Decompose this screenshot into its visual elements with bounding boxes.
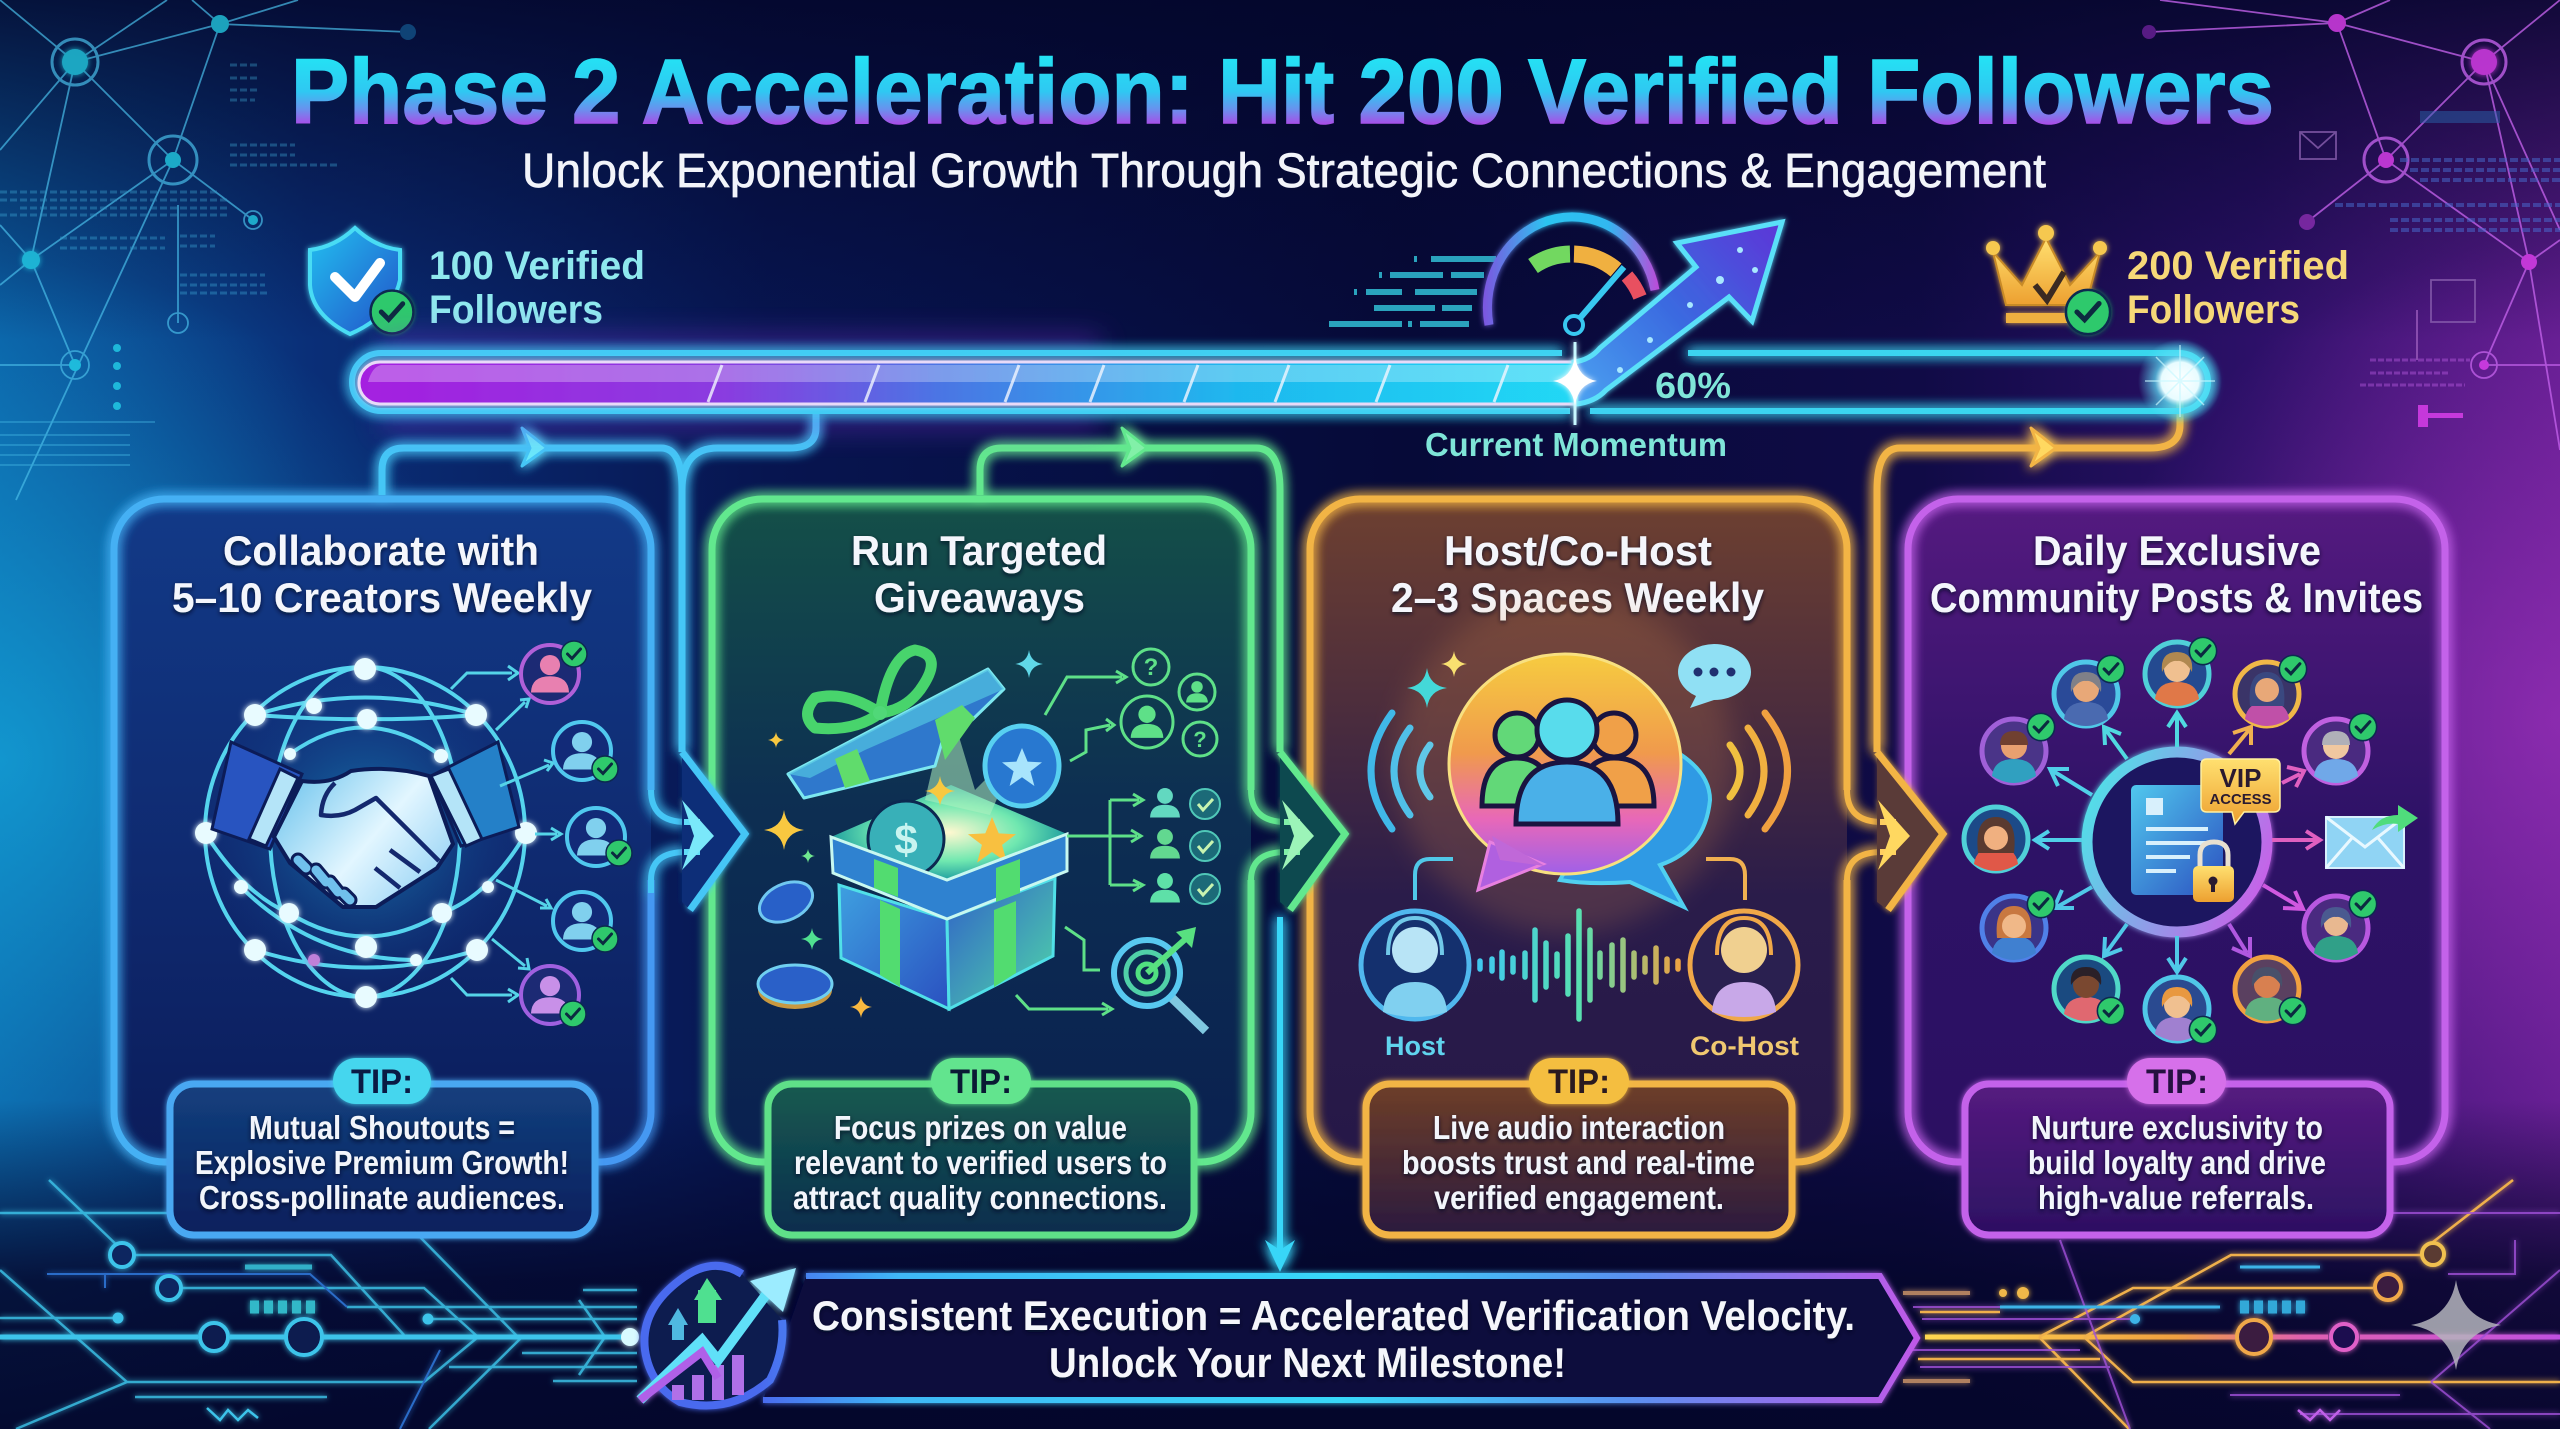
tip text: build loyalty and drive bbox=[2028, 1144, 2326, 1181]
panel 2 content: giveaways: ? bbox=[1144, 654, 1158, 681]
circuit decoration: bottom right bbox=[1900, 1180, 2560, 1429]
icon: chat bubbles with group bbox=[1395, 594, 1751, 934]
tip pill bbox=[1529, 1058, 1629, 1104]
end milestone: 200 verified followers bbox=[1986, 225, 2349, 334]
VIP access tag bbox=[2201, 759, 2280, 824]
end node glow bbox=[2138, 339, 2222, 423]
community avatars bbox=[1964, 637, 2377, 1044]
panel 4 background bbox=[1908, 499, 2445, 1162]
tip pill: TIP: bbox=[1548, 1063, 1610, 1101]
subtitle: Unlock Exponential Growth Through Strategic Connections & Engagement bbox=[522, 145, 2046, 198]
panel 4 outline bbox=[1908, 499, 2445, 1162]
circuit decoration: bottom left bbox=[0, 1180, 639, 1429]
start label bbox=[429, 244, 645, 332]
tip box 2 bbox=[768, 1058, 1194, 1235]
tip text bbox=[793, 1109, 1167, 1216]
icon: globe network with handshake bbox=[195, 641, 632, 1027]
icon: decorative sparkle bottom right bbox=[2411, 1280, 2501, 1370]
tip text: verified engagement. bbox=[1434, 1179, 1724, 1216]
panel 2 heading: Run Targeted bbox=[851, 527, 1107, 574]
progress bar fill bbox=[359, 362, 1576, 404]
arrow chevron: panel 2 to 3 bbox=[1280, 752, 1345, 910]
label: co-host: Co-Host bbox=[1690, 1031, 1799, 1061]
tip text: Live audio interaction bbox=[1433, 1109, 1725, 1146]
icon: hub ring with document, lock and VIP tag bbox=[2087, 752, 2280, 932]
panel 2 heading: Giveaways bbox=[874, 574, 1085, 621]
banner text bbox=[812, 1292, 1855, 1386]
tip text: Explosive Premium Growth! bbox=[195, 1144, 569, 1181]
arrow chevron: panel 3 to 4 bbox=[1877, 752, 1943, 910]
connector and panel outline: orange bbox=[1310, 400, 2180, 1162]
targeted connectors and users bbox=[1016, 649, 1217, 1015]
tip text bbox=[2028, 1109, 2326, 1216]
tip box 3 bbox=[1366, 1058, 1792, 1235]
network decoration: top left bbox=[0, 0, 416, 500]
tip text: attract quality connections. bbox=[793, 1179, 1167, 1216]
tip text: Focus prizes on value bbox=[834, 1109, 1127, 1146]
tip text: Mutual Shoutouts = bbox=[249, 1109, 515, 1146]
start milestone: 100 verified followers bbox=[310, 228, 645, 334]
panel 1 content: collaborate bbox=[170, 527, 632, 1235]
icon: crown with check bbox=[1986, 225, 2110, 334]
tip text: high-value referrals. bbox=[2038, 1179, 2314, 1216]
banner text: Consistent Execution = Accelerated Verification Velocity. bbox=[812, 1292, 1855, 1339]
panel 3 heading: 2–3 Spaces Weekly bbox=[1391, 574, 1765, 621]
current position marker bbox=[1553, 342, 1597, 425]
panel 2 content: giveaways: ? bbox=[1193, 727, 1207, 752]
tip pill: TIP: bbox=[950, 1063, 1012, 1101]
panel 1 background bbox=[114, 499, 651, 1162]
avatars bbox=[521, 641, 632, 1027]
panel 4 content: community posts bbox=[1930, 527, 2423, 1235]
panel 1 heading: 5–10 Creators Weekly bbox=[172, 574, 593, 621]
speech bubble dots bbox=[1678, 644, 1751, 708]
panel 3 heading bbox=[1391, 527, 1765, 621]
icon: host and co-host avatars bbox=[1361, 859, 1798, 1019]
icon: open gift box bbox=[753, 650, 1067, 1018]
icon: target with magnifier bbox=[1114, 927, 1206, 1031]
label: current momentum: Current Momentum bbox=[1425, 426, 1727, 463]
tip pill bbox=[333, 1058, 431, 1104]
icon: sound waves bbox=[1371, 713, 1788, 829]
gift lid bbox=[788, 669, 1004, 798]
panel 1 heading bbox=[172, 527, 593, 621]
arrow chevron: panel 1 to 2 bbox=[682, 752, 745, 910]
panel 2 background bbox=[712, 499, 1251, 1162]
progress bar track bbox=[352, 353, 2208, 411]
start label: 100 Verified bbox=[429, 244, 645, 288]
tip pill bbox=[931, 1058, 1031, 1104]
hub arrows bbox=[2035, 713, 2320, 972]
bottom banner bbox=[640, 1266, 1917, 1406]
chart: audio waveform bbox=[1480, 911, 1678, 1019]
tip text: boosts trust and real-time bbox=[1402, 1144, 1755, 1181]
tip text: relevant to verified users to bbox=[794, 1144, 1167, 1181]
tip text bbox=[195, 1109, 569, 1216]
icon: shield with check bbox=[310, 228, 413, 334]
panel 3 background bbox=[1310, 499, 1847, 1162]
VIP access tag: VIP bbox=[2220, 763, 2261, 793]
panel 4 heading: Daily Exclusive bbox=[2033, 527, 2321, 574]
connector and panel outline: blue bbox=[114, 414, 816, 1162]
tip text bbox=[1402, 1109, 1755, 1216]
panel 3 content: spaces bbox=[1361, 527, 1799, 1235]
network decoration: top right bbox=[2142, 0, 2560, 450]
connector and panel outline: green bbox=[712, 428, 1286, 1162]
tip box 4 bbox=[1965, 1058, 2390, 1235]
title: Phase 2 Acceleration: Hit 200 Verified Followers bbox=[291, 41, 2274, 143]
start label: Followers bbox=[429, 288, 603, 332]
panel 2 heading bbox=[851, 527, 1107, 621]
VIP access tag: ACCESS bbox=[2210, 791, 2272, 808]
tip pill bbox=[2127, 1058, 2226, 1104]
purple halo bbox=[381, 345, 1100, 420]
network arrows bbox=[451, 666, 561, 1002]
panel 1 heading: Collaborate with bbox=[223, 527, 539, 574]
icon: open gift box: $ bbox=[894, 816, 918, 863]
tip text: Nurture exclusivity to bbox=[2031, 1109, 2323, 1146]
gift bow bbox=[808, 650, 931, 729]
icon: envelope with send arrow bbox=[2326, 805, 2418, 868]
panel 4 heading bbox=[1930, 527, 2423, 621]
banner text: Unlock Your Next Milestone! bbox=[1049, 1339, 1566, 1386]
banner frame bbox=[763, 1276, 1917, 1400]
panel 3 heading: Host/Co-Host bbox=[1444, 527, 1712, 574]
panel 2 content: giveaways bbox=[753, 527, 1220, 1235]
label: host: Host bbox=[1385, 1031, 1445, 1061]
tip pill: TIP: bbox=[2146, 1063, 2208, 1101]
icon: speed gauge bbox=[1329, 217, 1655, 334]
tip pill: TIP: bbox=[351, 1063, 413, 1101]
panel 4 heading: Community Posts & Invites bbox=[1930, 574, 2423, 621]
tip box 1 bbox=[170, 1058, 595, 1235]
label: 60 percent: 60% bbox=[1655, 365, 1731, 406]
lock bbox=[2193, 842, 2234, 902]
end label bbox=[2127, 244, 2349, 332]
arrow: momentum surge bbox=[1574, 222, 1782, 404]
end label: 200 Verified bbox=[2127, 244, 2349, 288]
end label: Followers bbox=[2127, 288, 2300, 332]
tip text: Cross-pollinate audiences. bbox=[199, 1179, 565, 1216]
icon: growth arrow in ring bbox=[640, 1266, 796, 1406]
progress bar bbox=[352, 217, 2222, 463]
arrow down to banner bbox=[1265, 917, 1295, 1272]
